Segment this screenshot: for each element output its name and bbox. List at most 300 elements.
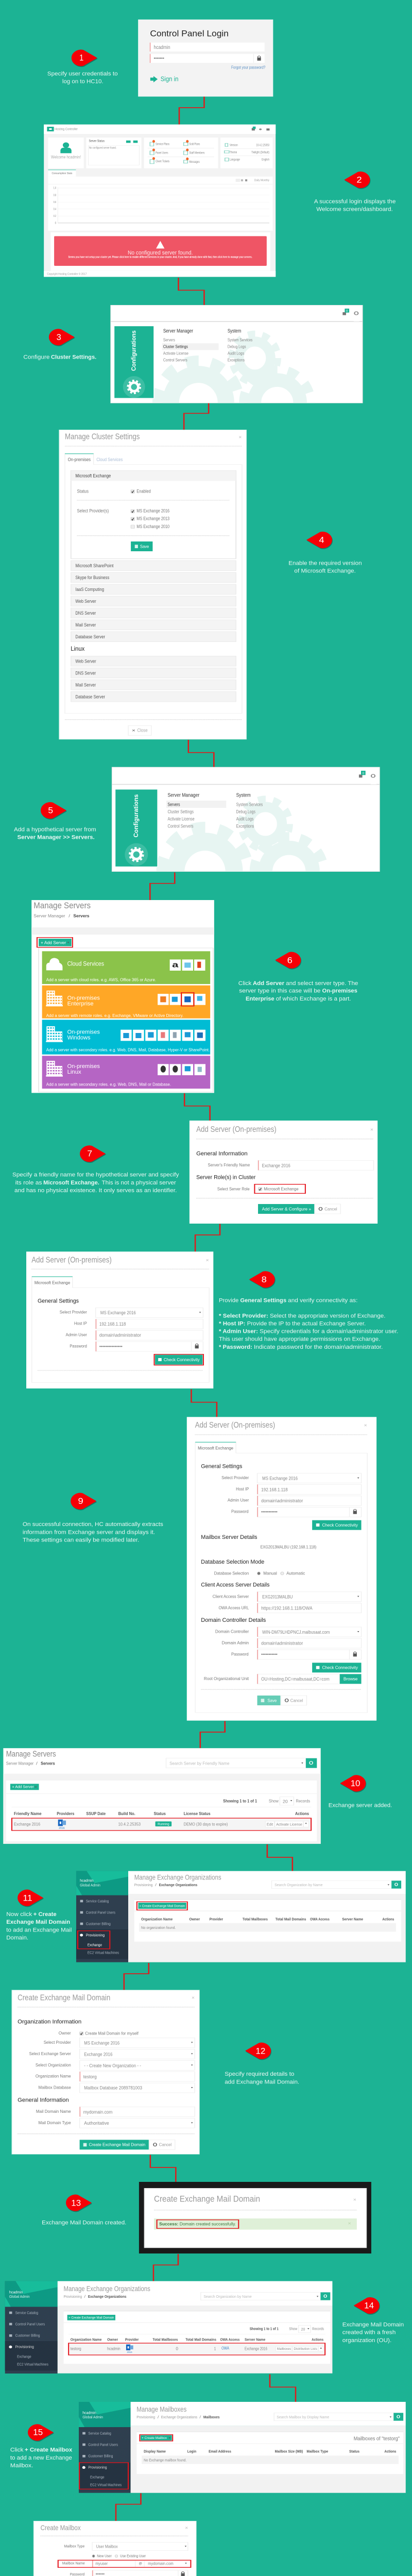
sidebar: Exchange — [88, 1943, 102, 1947]
form: organization information: Owner — [59, 2031, 71, 2036]
caption 6: Enterprise — [246, 996, 274, 1002]
caption 7: and has no physical existence. It only serves as an identifier. — [14, 1188, 177, 1194]
panel: manage exchange organizations, empty — [76, 1871, 406, 1962]
table row: testorg: Distribution Lists — [294, 2347, 317, 2351]
accordion list — [71, 561, 236, 702]
breadcrumb: / — [155, 1883, 157, 1887]
section: microsoft exchange: Enabled — [136, 489, 151, 494]
heading: create exchange mail domain: Create Exchange Mail Domain — [18, 1993, 110, 2002]
caption 1: Specify user credentials to — [47, 71, 118, 77]
form: general settings: ••••••••••••••• — [99, 1345, 123, 1349]
panel: add server, auto-detected details: × — [364, 1422, 367, 1428]
caption 8 — [219, 1297, 398, 1350]
menu column: server manager — [166, 792, 226, 829]
icon: step pin 6: 6 — [287, 956, 293, 965]
form: database selection mode: Manual — [263, 1571, 277, 1576]
section: microsoft exchange: Status — [77, 489, 89, 494]
card: organizations table: Total Mailboxes — [243, 1917, 268, 1921]
heading: control panel login: Control Panel Login — [150, 29, 229, 39]
caption 11: + Create — [33, 1911, 57, 1918]
card: organizations table: + Create Exchange Mail Domain — [139, 1904, 185, 1908]
panel: create exchange mail domain form — [12, 1990, 199, 2154]
card: organizations table — [134, 1899, 401, 1942]
table header: Actions — [295, 1811, 309, 1816]
form: mailbox identity — [57, 2543, 191, 2576]
card: version info: Language — [230, 158, 240, 161]
card: on-premises linux: On-premises — [67, 1063, 100, 1069]
icon: step pin 5: 5 — [48, 806, 53, 815]
caption 7: This is not a physical server — [101, 1180, 176, 1186]
heading: manage exchange organizations: Manage Exchange Organizations — [63, 2285, 150, 2293]
form: domain controller details: Check Connectivity — [322, 1666, 358, 1670]
caption 5 — [14, 826, 96, 841]
line chart: empty consumption stats: Daily Monthly — [254, 179, 270, 182]
line chart: empty consumption stats: 1.0 — [54, 187, 56, 190]
card: counters: Panel Users — [156, 151, 168, 155]
buttons — [258, 1204, 340, 1214]
form: general settings: Password — [70, 1344, 87, 1349]
add server button: + Add Server — [12, 1785, 34, 1789]
form: organization information — [18, 2019, 195, 2093]
sidebar: configurations: Configurations — [133, 794, 140, 837]
panel: create exchange mail domain form: × — [192, 1995, 195, 2001]
sidebar: Customer Billing — [86, 1922, 111, 1926]
table row: testorg: 2016 — [127, 2351, 132, 2354]
sidebar: hcadmin — [82, 2411, 96, 2415]
icon: step pin 8: 8 — [262, 1275, 267, 1284]
dashboard header: Hosting Controller — [55, 127, 78, 131]
paging controls: Show — [269, 1799, 279, 1804]
card: organizations table: OWA Access — [220, 2337, 239, 2342]
caption 6: Click — [238, 980, 252, 987]
form: mailbox server details — [201, 1534, 316, 1550]
sidebar: EC2 Virtual Machines — [90, 2483, 122, 2487]
line chart: empty consumption stats: 0.4 — [54, 208, 56, 211]
sidebar: Exchange — [90, 2475, 105, 2480]
caption 7: Microsoft Exchange. — [43, 1180, 99, 1186]
success message: Success: Domain created successfully. — [159, 2222, 236, 2227]
sidebar: EC2 Virtual Machines — [88, 1951, 119, 1955]
caption 9: On successful connection, HC automatically extracts — [23, 1521, 163, 1528]
breadcrumb: Provisioning — [134, 1883, 152, 1887]
menu column: system: System — [236, 792, 251, 798]
form: mailbox identity: myuser — [95, 2562, 108, 2566]
add server button: + Add Server — [41, 940, 66, 945]
buttons — [80, 2140, 175, 2149]
form: general settings — [201, 1463, 362, 1530]
card: version info: Theme — [230, 150, 237, 154]
menu column: system: System Services — [236, 802, 263, 807]
panel: add server, friendly name — [190, 1121, 377, 1224]
menu column: server manager: Activate License — [163, 351, 188, 356]
form: general settings: Admin User — [228, 1498, 249, 1503]
tabs: Cloud Services — [96, 457, 123, 462]
accordion list: Mail Server — [75, 622, 96, 628]
panel: control panel login — [139, 20, 273, 96]
breadcrumb: Exchange Organizations — [159, 1883, 197, 1887]
form: general settings: 192.168.1.118 — [99, 1321, 126, 1327]
card: mailboxes table: Login — [187, 2449, 196, 2453]
tab: microsoft exchange: Microsoft Exchange — [198, 1446, 233, 1451]
caption 9 — [23, 1521, 163, 1543]
sidebar: Provisioning — [86, 1933, 105, 1938]
section: server roles: Select Server Role — [217, 1187, 250, 1192]
card: counters: Staff Members — [189, 151, 205, 155]
sidebar: Global Admin — [80, 1883, 100, 1888]
card: cloud services: Add a server with cloud roles. e.g. AWS, Office 365 or Azure. — [46, 977, 156, 982]
menu column: server manager: Control Servers — [168, 824, 194, 829]
panel: manage servers, add server menu — [31, 900, 214, 1093]
heading: manage servers: Manage Servers — [6, 1750, 56, 1759]
buttons: Save — [267, 1699, 277, 1703]
card: on-premises enterprise — [42, 986, 210, 1019]
form: general settings — [38, 1298, 203, 1351]
search box: Search Organization by Name — [274, 1883, 323, 1887]
search box — [166, 1758, 317, 1768]
heading: manage exchange organizations: Manage Exchange Organizations — [134, 1873, 221, 1881]
form: organization information: Select Exchange Server — [29, 2052, 71, 2056]
panel: manage mailboxes, empty — [79, 2402, 406, 2493]
card: mailboxes table: Status — [349, 2449, 359, 2453]
form: organization information: Mailbox Database 2089781003 — [84, 2086, 142, 2091]
tab: microsoft exchange: Microsoft Exchange — [35, 1281, 70, 1285]
icon: step pin 11: 11 — [23, 1893, 32, 1903]
form: organization information: Organization Information — [18, 2019, 81, 2025]
breadcrumb — [136, 2415, 220, 2419]
card: counters: Client Tickets — [156, 160, 169, 163]
close button — [128, 725, 151, 735]
section: microsoft exchange: MS Exchange 2010 — [136, 524, 169, 529]
form: general settings: MS Exchange 2016 — [262, 1476, 298, 1481]
form: organization information: Organization Name — [36, 2074, 71, 2079]
card: organizations table: Server Name — [245, 2337, 265, 2342]
card: organizations table: Server Name — [342, 1917, 363, 1921]
line chart: empty consumption stats: 0.6 — [54, 201, 56, 204]
breadcrumb: / — [199, 2415, 201, 2419]
menu column: server manager: Servers — [163, 337, 175, 343]
username field: hcadmin — [153, 44, 170, 50]
line chart: empty consumption stats — [48, 177, 273, 231]
callout: step 1 — [47, 49, 118, 84]
callout: step 3 — [23, 329, 96, 361]
form: database selection mode: Database Selection Mode — [201, 1559, 265, 1565]
card: counters: Service Plans — [156, 142, 169, 146]
close button: Close — [137, 728, 148, 733]
card: on-premises windows: On-premises — [67, 1029, 100, 1035]
breadcrumb: Mailboxes — [203, 2415, 220, 2419]
form: general settings: ••••••••••• — [261, 1510, 278, 1514]
sidebar — [5, 2281, 58, 2374]
card: version info: English — [262, 158, 269, 161]
card: organizations table — [63, 2311, 330, 2364]
form: mailbox identity: New User — [97, 2554, 112, 2558]
form: mailbox identity: User Mailbox — [96, 2545, 118, 2549]
card: organizations table: Show — [289, 2327, 297, 2331]
sidebar: configurations — [115, 789, 158, 867]
panel: add server, auto-detected details — [187, 1417, 376, 1721]
callout: step 5 — [14, 802, 96, 841]
card: on-premises linux: Add a server with secondary roles. e.g. Web, DNS, Mail or Database. — [46, 1082, 171, 1087]
form: general settings: Password — [231, 1510, 249, 1514]
caption 6: On-premises — [322, 988, 357, 994]
breadcrumb: Provisioning — [136, 2415, 155, 2419]
table row: testorg: Exchange 2016 — [245, 2347, 267, 2351]
icon: step pin 5 — [41, 802, 67, 820]
dashboard header — [44, 125, 276, 134]
table row: testorg: hcadmin — [107, 2347, 121, 2351]
caption 7 — [12, 1172, 179, 1194]
sidebar: hcadmin — [9, 2290, 23, 2295]
caption 6 — [238, 980, 358, 1002]
card: organizations table: Total Mailboxes — [152, 2337, 178, 2342]
card: server status — [86, 138, 141, 168]
callout: step 11 — [6, 1890, 72, 1941]
sidebar: hcadmin — [80, 1878, 94, 1883]
sidebar: Customer Billing — [15, 2333, 40, 2338]
password field — [150, 54, 265, 63]
heading: create exchange mail domain: Create Exchange Mail Domain — [154, 2194, 260, 2204]
section: server roles: Microsoft Exchange — [264, 1187, 299, 1192]
accordion list: IaaS Computing — [75, 587, 104, 592]
card: organizations table: + Create Exchange Mail Domain — [68, 2316, 114, 2319]
card: welcome — [48, 138, 84, 168]
section: microsoft exchange: Microsoft Exchange — [75, 473, 111, 479]
panel: exchange mail domain success — [139, 2182, 371, 2253]
table row: exchange 2016: Running — [158, 1822, 169, 1826]
form: client access server details: Client Access Server Details — [201, 1582, 270, 1588]
caption 15: to add a new Exchange — [10, 2455, 72, 2461]
notification icons: 0 — [346, 310, 348, 313]
breadcrumb: / — [158, 2415, 159, 2419]
menu column: system: Exceptions — [236, 824, 254, 829]
panel: manage cluster settings — [59, 430, 247, 739]
icon: step pin 1: 1 — [79, 53, 83, 63]
table row: testorg: 0 — [176, 2347, 178, 2351]
menu column: system: Audit Logs — [228, 351, 244, 356]
form: client access server details: EXG2013MALBU — [262, 1595, 293, 1600]
table header: SSUP Date — [86, 1811, 106, 1816]
caption 11: to add an Exchange Mail — [6, 1927, 72, 1933]
panel: dashboard — [44, 125, 276, 277]
tab: consumption stats — [48, 170, 76, 177]
form: database selection mode: Automatic — [286, 1571, 305, 1576]
sidebar: Provisioning — [15, 2345, 34, 2349]
form: organization information: testorg — [83, 2074, 97, 2079]
icon: step pin 4: 4 — [319, 535, 324, 545]
icon: step pin 9 — [71, 1493, 97, 1510]
form: organization information: MS Exchange 2016 — [84, 2041, 119, 2046]
card: mailboxes table: Email Address — [209, 2449, 231, 2453]
icon: step pin 2: 2 — [356, 175, 362, 185]
heading: add server: Add Server (On-premises) — [195, 1421, 275, 1430]
tabs: On-premises — [68, 457, 91, 462]
breadcrumb: Exchange Organizations — [161, 2415, 197, 2419]
icon: step pin 8 — [249, 1271, 276, 1289]
add server button — [37, 938, 73, 947]
panel: configurations menu, cluster settings: System Services — [228, 337, 253, 343]
table row: exchange 2016: 2016 — [59, 1827, 65, 1830]
sidebar: Service Catalog — [15, 2311, 38, 2315]
form: domain controller details: Domain Controller — [215, 1630, 249, 1634]
caption 15: + Create Mailbox — [25, 2447, 72, 2453]
form: general information: mydomain.com — [83, 2110, 112, 2115]
card: organizations table: Organization Name — [71, 2337, 101, 2342]
card: counters — [144, 138, 218, 168]
breadcrumb: / — [68, 914, 71, 919]
caption 2 — [314, 198, 396, 212]
search box: Search Server by Friendly Name — [169, 1761, 229, 1766]
success message: × — [348, 2221, 351, 2226]
card: version info: 10.4.2.25353 — [256, 143, 269, 147]
breadcrumb: / — [36, 1761, 38, 1766]
alert: no configured server: No configured server found. — [128, 250, 193, 256]
form: mailbox identity: Mailbox Type — [64, 2544, 84, 2549]
accordion list: Database Server — [75, 634, 105, 639]
caption 8: Provide — [219, 1297, 238, 1304]
caption 8: * Password: — [219, 1344, 252, 1350]
caption 5: Server Manager >> Servers. — [18, 834, 95, 841]
card: organizations table: No organization found. — [141, 1926, 176, 1930]
callout: step 7 — [12, 1145, 179, 1194]
caption 15: Click — [10, 2447, 24, 2453]
table row: exchange 2016 — [12, 1818, 311, 1831]
caption 15 — [10, 2447, 72, 2469]
form: organization information: Mailbox Database — [38, 2086, 71, 2090]
form: mailbox identity: @ — [139, 2561, 142, 2565]
form: organization information: Exchange 2016 — [84, 2052, 112, 2057]
caption 6: Add Server — [253, 980, 284, 987]
connector arrows — [116, 96, 296, 2576]
search box — [272, 1880, 401, 1889]
card: mailboxes table: Actions — [384, 2449, 396, 2453]
notification icons — [342, 309, 358, 315]
callout: step 4 — [288, 532, 362, 574]
caption 5: Add a hypothetical server from — [14, 826, 96, 833]
tab: microsoft exchange — [195, 1442, 367, 1713]
breadcrumb: Servers — [41, 1761, 55, 1766]
form: general settings: domain\administrator — [261, 1498, 303, 1503]
sidebar — [79, 2402, 131, 2493]
form: domain controller details: Domain Admin — [222, 1641, 249, 1646]
form: domain controller details: Root Organizational Unit — [204, 1677, 249, 1681]
check connectivity button — [154, 1354, 203, 1365]
card: cloud services — [42, 951, 210, 984]
card: version info — [220, 138, 273, 168]
breadcrumb: / — [84, 2295, 86, 2299]
card: organizations table: Actions — [382, 1917, 394, 1921]
icon: step pin 14: 14 — [364, 2301, 374, 2311]
caption 3 — [23, 354, 96, 361]
menu column: server manager: Server Manager — [168, 792, 200, 798]
table header: Providers — [57, 1811, 74, 1816]
sign in link: Sign in — [161, 75, 178, 83]
breadcrumb: Server Manager — [33, 914, 65, 919]
card: organizations table: OWA Access — [310, 1917, 330, 1921]
menu column: system: Audit Logs — [236, 817, 253, 822]
form: domain controller details: WIN-DM79LHDPNCJ.malbusaat.com — [262, 1630, 330, 1635]
panel: manage servers, server added — [4, 1748, 320, 1844]
section: microsoft exchange: Select Provider(s) — [77, 509, 109, 514]
menu column: server manager: Server Manager — [163, 328, 193, 334]
form: general information: Mail Domain Type — [38, 2121, 71, 2125]
form: domain controller details — [201, 1617, 362, 1684]
form: domain controller details: OU=Hosting,DC=malbusaat,DC=com — [261, 1676, 330, 1682]
sidebar: configurations — [114, 326, 154, 398]
table header: Status — [153, 1811, 166, 1816]
paging controls: 20 — [283, 1800, 288, 1804]
menu column: system — [236, 792, 263, 829]
sidebar: Global Admin — [82, 2415, 103, 2419]
accordion list: Microsoft SharePoint — [75, 563, 114, 568]
menu column: system: System — [228, 328, 241, 334]
table row: testorg: OWA — [221, 2346, 229, 2351]
icon: step pin 10: 10 — [351, 1778, 360, 1788]
table row: testorg: Mailboxes — [277, 2347, 291, 2351]
table header: Build No. — [118, 1811, 135, 1816]
caption 7: Specify a friendly name for the hypothetical server and specify — [12, 1172, 179, 1178]
caption 14: organization (OU). — [342, 2337, 391, 2344]
form: domain controller details: ••••••••••• — [261, 1652, 278, 1657]
card: on-premises linux: Linux — [67, 1069, 81, 1075]
paging controls: Records — [296, 1799, 310, 1804]
search box — [274, 2413, 403, 2421]
caption 6: and select server type. The — [286, 980, 358, 987]
caption 4 — [288, 560, 362, 574]
caption 3: Configure — [23, 354, 50, 361]
caption 1: log on to HC10. — [62, 78, 104, 84]
section: microsoft exchange: MS Exchange 2016 — [136, 509, 169, 514]
heading: manage cluster settings: Manage Cluster Settings — [65, 433, 140, 442]
menu column: server manager: Activate License — [168, 817, 195, 822]
caption 7: its role as — [15, 1180, 42, 1186]
callout: step 14 — [342, 2297, 404, 2344]
card: mailboxes table: Mailbox Type — [306, 2449, 328, 2453]
card: organizations table: 20 — [301, 2327, 305, 2331]
sidebar: Exchange — [17, 2354, 31, 2359]
menu column: system: Debug Logs — [228, 344, 246, 349]
panel: create mailbox form: × — [185, 2525, 188, 2531]
form: general settings: 192.168.1.118 — [261, 1487, 288, 1493]
icon: step pin 13 — [66, 2195, 92, 2212]
caption 15: Mailbox. — [10, 2463, 33, 2469]
forgot password link: Forgot your password? — [231, 65, 265, 70]
card: server status: No configured server found. — [89, 147, 116, 149]
section: server roles — [196, 1174, 305, 1193]
icon: step pin 3 — [49, 329, 75, 346]
form: mailbox server details: EXG2013MALBU (192.168.1.118) — [261, 1545, 316, 1550]
icon: step pin 4 — [306, 532, 333, 549]
section: microsoft exchange — [71, 470, 236, 558]
sidebar: Service Catalog — [86, 1899, 109, 1904]
caption 6: of which Exchange is a part. — [276, 996, 351, 1002]
form: client access server details: Client Access Server — [213, 1595, 249, 1599]
callout: step 2 — [314, 172, 396, 212]
card: on-premises windows — [42, 1020, 210, 1055]
search box: Search Mailbox by Display Name — [277, 2415, 329, 2419]
form: domain controller details: Browse — [344, 1677, 357, 1682]
form: general settings: General Settings — [201, 1463, 242, 1469]
caption 13: Exchange Mail Domain created. — [42, 2219, 126, 2226]
panel: manage cluster settings: × — [238, 434, 242, 440]
menu column: system: Exceptions — [228, 358, 245, 363]
form: general information: Authoritative — [84, 2121, 109, 2126]
card: organizations table: Owner — [189, 1917, 200, 1921]
username field — [150, 43, 265, 52]
callout: step 6 — [238, 952, 358, 1002]
form: general settings: domain\administrator — [99, 1333, 141, 1338]
sidebar — [76, 1871, 128, 1962]
caption 1 — [47, 71, 118, 84]
